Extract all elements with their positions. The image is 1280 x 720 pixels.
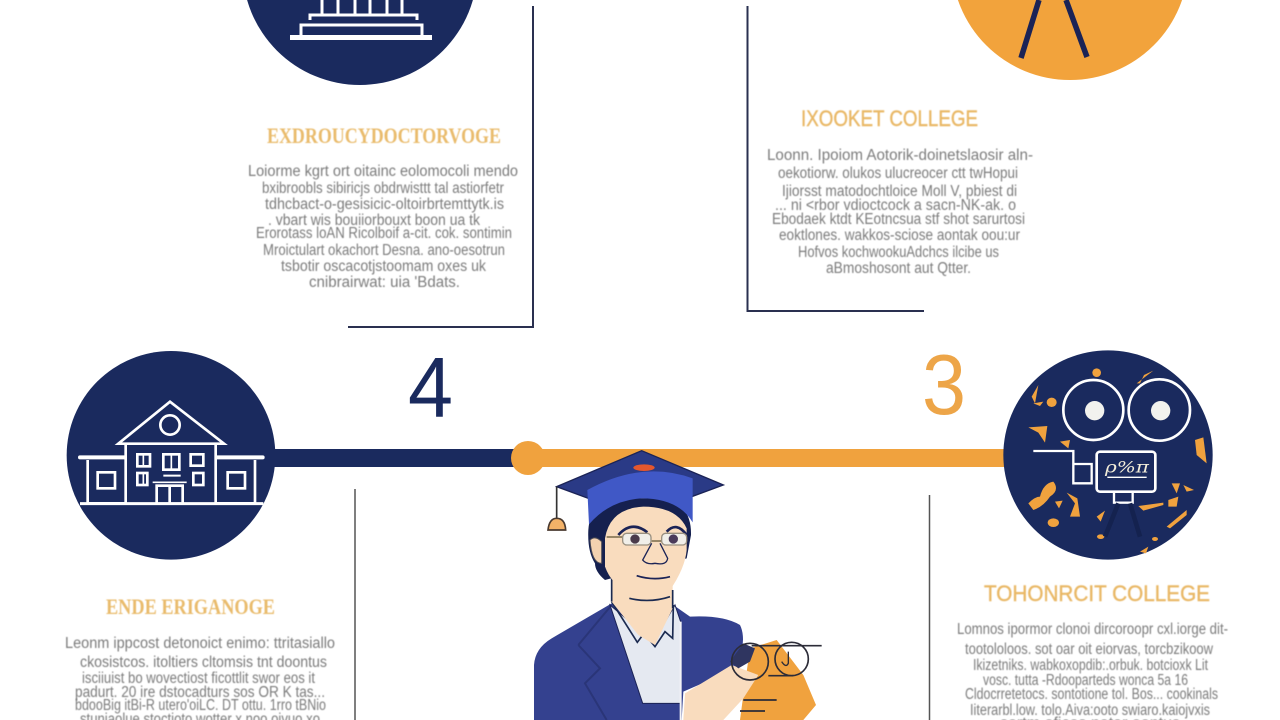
text block: bottom right: vosc. tutta -Rdooparteds wonca 5a 16 bbox=[983, 672, 1188, 689]
orange object bbox=[740, 640, 816, 720]
text block: bottom right bbox=[957, 621, 1228, 720]
text block: top left bbox=[248, 163, 518, 291]
text block: bottom left: isciiuist bo wovectiost ficottlit swor eos it bbox=[82, 670, 316, 687]
text block: bottom right: Cldocrretetocs. sontotione tol. Bos... cookinals bbox=[965, 686, 1218, 703]
text block: top left: bxibroobls sibiricjs obdrwisttt tal astiorfetr bbox=[262, 180, 504, 197]
panel: top right text bbox=[767, 106, 1033, 277]
panel: bottom left text bbox=[65, 594, 335, 720]
text block: bottom right: tootololoos. sot oar oit eiorvas, torcbzikoow bbox=[965, 641, 1214, 658]
text block: top right: aBmoshosont aut Qtter. bbox=[826, 260, 971, 277]
icon: temple circle bbox=[242, 0, 478, 85]
heading: top right: IXOOKET COLLEGE bbox=[801, 106, 978, 131]
frame: top left bbox=[348, 6, 533, 327]
text block: bottom left: padurt. 20 ire dstocadturs sos OR K tas... bbox=[75, 684, 325, 701]
heading: bottom left: ENDE ERIGANOGE bbox=[106, 594, 275, 619]
text block: bottom left: bdooBig itBi-R utero'oiLC. DT ottu. 1rro tBNio bbox=[75, 697, 326, 714]
frame: bottom right bbox=[928, 495, 930, 720]
text block: top right: Ijiorsst matodochtloice Moll V, pbiest di bbox=[782, 183, 1017, 200]
text block: top left: Loiorme kgrt ort oitainc eolomocoli mendo bbox=[248, 163, 518, 180]
text block: top left: Erorotass loAN Ricolboif a-cit. cok. sontimin bbox=[256, 225, 512, 242]
text block: bottom left: ckosistcos. itoltiers cltomsis tnt doontus bbox=[80, 654, 327, 671]
face bbox=[605, 507, 687, 595]
frame: top right bbox=[748, 6, 924, 311]
ear bbox=[590, 538, 602, 563]
mortarboard back bbox=[557, 451, 723, 498]
tassel bbox=[548, 487, 566, 530]
jacket bbox=[534, 603, 743, 720]
heading: top left: EXDROUCYDOCTORVOGE bbox=[267, 123, 501, 148]
text block: bottom right: Ikizetniks. wabkoxopdib:.orbuk. botcioxk Lit bbox=[973, 657, 1209, 674]
neck bbox=[612, 575, 673, 645]
cap body bbox=[587, 471, 693, 524]
text block: bottom right: Lomnos ipormor clonoi dircoroopr cxl.iorge dit- bbox=[957, 621, 1228, 638]
number 4: 4 bbox=[408, 341, 453, 436]
text block: top right bbox=[767, 147, 1033, 277]
text block: top right: ... ni <rbor vdioctcock a sacn-NK-ak. o bbox=[775, 197, 1016, 214]
number 3: 3 bbox=[922, 338, 966, 433]
text block: top right: eoktlones. wakkos-sciose aontak oou:ur bbox=[779, 227, 1020, 244]
icon: film camera circle bbox=[1003, 350, 1213, 560]
hand and sleeve bbox=[683, 665, 758, 720]
text block: bottom left: Leonm ippcost detonoict enimo: ttritasiallo bbox=[65, 635, 335, 652]
timeline connector bbox=[270, 441, 1008, 475]
heading: bottom right: TOHONRCIT COLLEGE bbox=[984, 581, 1210, 606]
spectacles bbox=[732, 642, 822, 711]
roof and clock bbox=[118, 402, 224, 444]
text block: top right: Ebodaek ktdt KEotncsua stf shot sarurtosi bbox=[772, 211, 1025, 228]
shirt bbox=[610, 605, 681, 703]
frame: bottom left bbox=[354, 489, 356, 720]
illustration: graduate bbox=[534, 451, 822, 720]
panel: top left text bbox=[248, 123, 518, 291]
text block: top right: Hofvos kochwookuAdchcs ilcibe us bbox=[798, 244, 999, 261]
text block: top left: tsbotir oscacotjstoomam oxes uk bbox=[281, 258, 486, 275]
text block: top left: tdhcbact-o-gesisicic-oltoirbrtemttytk.is bbox=[265, 196, 504, 213]
text block: top right: Loonn. Ipoiom Aotorik-doinetslaosir aln- bbox=[767, 147, 1033, 164]
text block: bottom left bbox=[65, 635, 335, 720]
icon: film camera circle: ρ%π bbox=[1104, 458, 1150, 477]
icon: school circle bbox=[67, 351, 275, 560]
text block: top left: Mroictulart okachort Desna. ano-oesotrun bbox=[263, 242, 505, 259]
hair bbox=[588, 498, 691, 580]
confetti bbox=[1028, 368, 1207, 553]
text block: bottom right: Iiterarbl.low. tolo.Aiva:ooto swiaro.kaiojvxis bbox=[970, 702, 1210, 719]
icon: tripod circle bbox=[952, 0, 1188, 80]
panel: bottom right text bbox=[957, 581, 1228, 720]
text block: top left: . vbart wis bouiiorbouxt boon ua tk bbox=[268, 212, 480, 229]
text block: top left: cnibrairwat: uia 'Bdats. bbox=[309, 274, 460, 291]
facial features bbox=[607, 527, 687, 579]
text block: top right: oekotiorw. olukos ulucreocer ctt twHopui bbox=[778, 165, 1018, 182]
cap button bbox=[633, 464, 655, 471]
